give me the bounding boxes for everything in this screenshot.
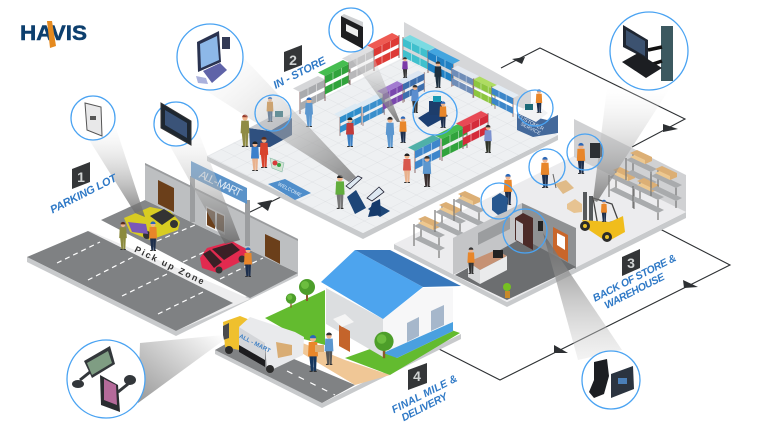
- heading: 1 parking lot: 1: [77, 169, 85, 185]
- callout circle: store scanner: [329, 8, 373, 52]
- delivery truck: [223, 316, 304, 373]
- locker cabinet: [515, 213, 543, 250]
- sign: All-Mart: ALL - MART: [197, 169, 244, 200]
- callout circle: warehouse handheld: [529, 149, 565, 185]
- callout circle: cashier: [255, 95, 291, 131]
- office room: [453, 203, 576, 300]
- heading: 4 final mile and delivery: FINAL MILE &: [390, 373, 459, 416]
- callout circle: vehicle device mounts: [67, 340, 145, 418]
- callout cone: vehicle mount: [138, 335, 224, 403]
- cashier counter: [249, 97, 292, 147]
- mobile cart: [492, 193, 508, 215]
- forklift: [567, 192, 625, 242]
- callout circle: docking hardware: [582, 351, 640, 409]
- central POS station: [418, 96, 448, 128]
- wall mount screen: [592, 144, 602, 157]
- callout circle: POS kiosk: [177, 24, 243, 90]
- heading: 4 final mile and delivery: DELIVERY: [400, 390, 451, 424]
- car: yellow: [124, 207, 180, 240]
- heading: 2 in-store: IN - STORE: [272, 55, 328, 92]
- callout circle: wall tablet: [154, 102, 198, 146]
- sign: All-Mart: [190, 161, 250, 246]
- warehouse back wall: [574, 119, 686, 212]
- callout circle: wall-mounted workstation: [610, 12, 688, 90]
- delivery ground: [215, 290, 461, 408]
- callout cone: locker terminal: [543, 233, 622, 360]
- delivery truck: ALL - MART: [238, 334, 271, 355]
- office door: [553, 227, 568, 262]
- welcome mat: [268, 179, 311, 200]
- callout circle: central POS: [413, 91, 457, 135]
- parking dashes: [57, 225, 263, 314]
- callout circle: warehouse scanner station: [567, 134, 603, 170]
- shopping cart: [270, 158, 284, 172]
- road dashes: [287, 371, 335, 395]
- pallet trolley: [553, 174, 574, 194]
- panel: in-store: [207, 22, 558, 239]
- heading: 3 back of store and warehouse: BACK OF STORE &: [591, 252, 678, 305]
- logo: Havis: HAVIS: [20, 22, 87, 45]
- callout cone: forklift mount: [593, 88, 670, 202]
- arrow: store to warehouse: [501, 48, 685, 147]
- callout cone: store scanner: [345, 47, 400, 122]
- warehouse staff: [504, 143, 585, 205]
- car: red: [200, 241, 248, 274]
- self-checkout kiosks: [346, 176, 390, 217]
- welcome mat: WELCOME: [277, 182, 303, 199]
- customer service desk: CUSTOMER: [516, 114, 545, 132]
- callout circle: mobile cart: [481, 183, 517, 219]
- shelves: middle row: [334, 71, 424, 136]
- office plant: [503, 283, 511, 298]
- panel: parking lot: [27, 161, 298, 336]
- arrow: parking lot to store: [248, 194, 287, 213]
- customer service desk: SERVICE: [519, 121, 542, 137]
- callout cone: POS kiosk: [205, 57, 356, 182]
- panel: final mile and delivery: [215, 250, 461, 408]
- people: parking lot: [119, 221, 252, 277]
- shoppers and staff: [241, 57, 492, 209]
- warehouse floor: [394, 156, 686, 307]
- store back wall: [404, 22, 531, 112]
- callout circle: customer service: [517, 90, 553, 126]
- heading: 4 final mile and delivery: 4: [413, 368, 421, 384]
- store front wall: [145, 163, 298, 273]
- warehouse shelves: [414, 150, 682, 258]
- heading: 3 back of store and warehouse: WAREHOUSE: [603, 271, 668, 312]
- heading: 1 parking lot: PARKING LOT: [48, 172, 120, 216]
- callout cone: payment terminal: [88, 125, 145, 217]
- shelves: front row: [408, 111, 488, 173]
- store floor: [207, 57, 558, 239]
- callout circle: locker cabinet: [503, 209, 547, 253]
- arrow: warehouse to final mile: [437, 228, 730, 380]
- pick up zone label: Pick up Zone: [133, 244, 206, 286]
- house: [321, 250, 461, 358]
- shelves: back row: [293, 33, 519, 117]
- parking lot ground: [27, 200, 298, 336]
- panel: back of store and warehouse: [394, 119, 686, 307]
- callout cone: wall tablet: [170, 128, 240, 244]
- delivery people: [308, 332, 333, 372]
- heading: 2 in-store: 2: [289, 52, 297, 68]
- trees: [286, 279, 394, 358]
- callout circle: payment terminal: [71, 96, 115, 140]
- office desk and worker: [467, 247, 507, 284]
- customer service desk: [516, 89, 558, 137]
- heading: 3 back of store and warehouse: 3: [627, 255, 635, 271]
